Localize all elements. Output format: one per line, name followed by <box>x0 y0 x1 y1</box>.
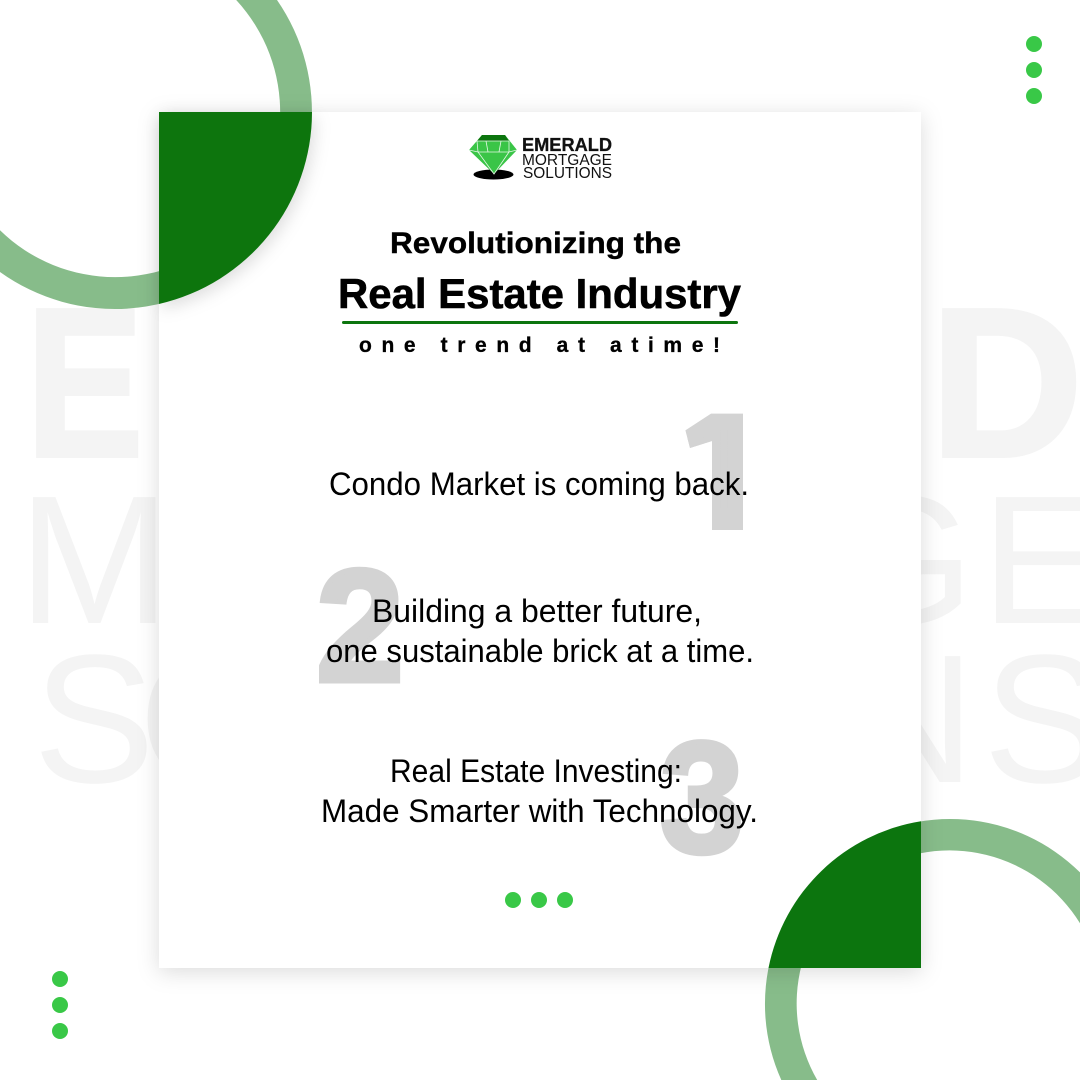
heading underline <box>342 321 738 324</box>
number 2: 2 <box>316 536 404 715</box>
number 1: 1 <box>672 385 768 577</box>
quarter circle: bottom right corner <box>768 821 921 968</box>
trend 3 text: Real Estate Investing: <box>390 753 682 789</box>
background watermark wordmark: MORTGAGE <box>18 457 1080 662</box>
background watermark wordmark: SOLUTIONS <box>33 616 1080 821</box>
tagline: one trend at atime! <box>359 334 720 357</box>
dots: top right <box>1026 36 1042 104</box>
quarter circle: top left corner <box>159 112 312 304</box>
trend 3 text: Made Smarter with Technology. <box>321 793 758 829</box>
background watermark wordmark: MERAL <box>175 262 912 504</box>
icon: emerald gem <box>469 135 517 180</box>
logo <box>469 135 612 182</box>
ring: top left <box>0 0 312 309</box>
logo wordmark <box>522 135 612 182</box>
heading line 2: Real Estate Industry <box>338 270 742 317</box>
background watermark wordmark <box>18 262 1080 821</box>
heading line 1: Revolutionizing the <box>390 227 681 260</box>
number 3: 3 <box>660 710 744 886</box>
trend 3 text <box>321 753 758 829</box>
logo wordmark: EMERALD <box>522 135 612 155</box>
dots: bottom left <box>52 971 68 1039</box>
trend 2 text: Building a better future, <box>372 593 702 629</box>
title <box>338 227 742 357</box>
panel: white card <box>159 112 921 968</box>
ring: bottom right <box>765 819 1080 1080</box>
dots: card bottom <box>505 892 573 908</box>
logo wordmark: MORTGAGE <box>522 152 612 169</box>
trend 1 text: Condo Market is coming back. <box>329 466 749 502</box>
logo wordmark: SOLUTIONS <box>523 165 612 182</box>
background watermark wordmark: E <box>26 266 143 502</box>
trend 2 text: one sustainable brick at a time. <box>326 633 754 669</box>
background watermark wordmark: D <box>930 264 1080 501</box>
trend 2 text <box>326 593 754 669</box>
